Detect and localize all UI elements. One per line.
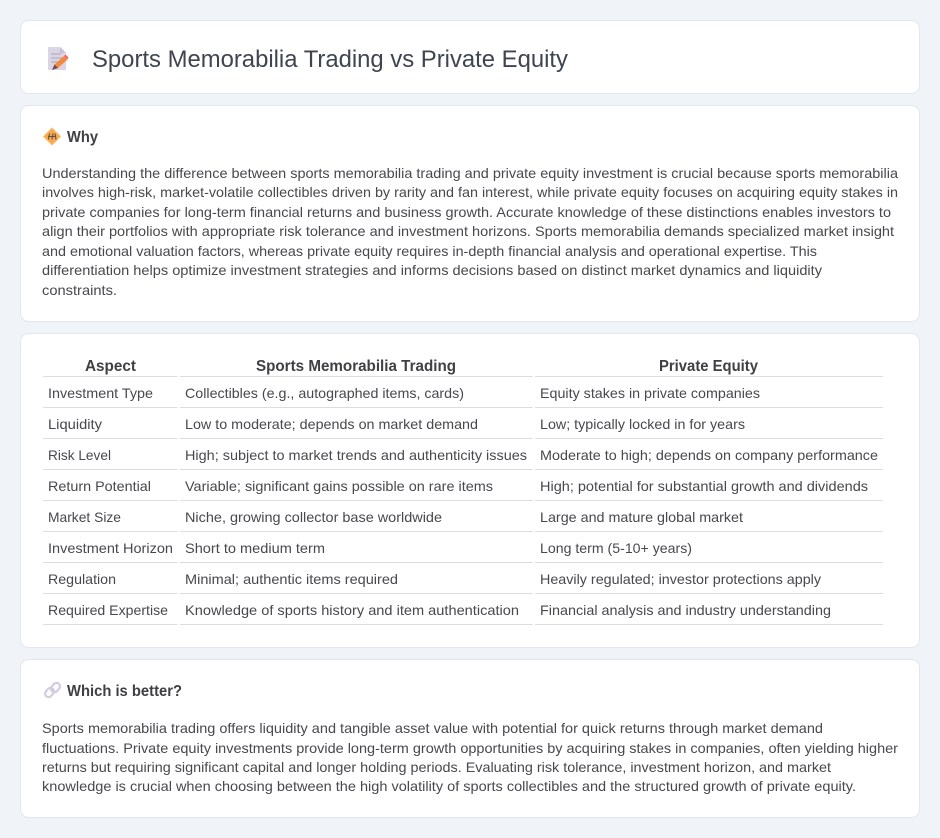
row: investment type: Equity stakes in private companies <box>540 385 760 401</box>
row: investment type: Investment Type <box>48 385 153 401</box>
panel: which is better <box>20 660 920 818</box>
text block: why paragraph: align their portfolios with appropriate risk tolerance and investment horizons. Sports memorabilia demands specialized market insight <box>42 223 894 239</box>
panel: why <box>20 106 920 322</box>
row: required expertise: Financial analysis and industry understanding <box>540 602 831 618</box>
row: return potential: Variable; significant gains possible on rare items <box>185 478 493 494</box>
row: investment horizon <box>48 540 692 556</box>
row: required expertise <box>48 602 831 618</box>
text block: why paragraph: constraints. <box>42 282 117 298</box>
row: liquidity <box>48 416 745 432</box>
text block: which is better paragraph: fluctuations. Private equity investments provide long-term growth opportunities by acquiring stakes in companies, often yielding higher <box>42 740 898 756</box>
table header row: Sports Memorabilia Trading <box>256 358 456 375</box>
row: return potential: Return Potential <box>48 478 151 494</box>
row: investment type: Collectibles (e.g., autographed items, cards) <box>185 385 464 401</box>
text block: why paragraph: Understanding the difference between sports memorabilia trading and private equity investment is crucial because sports memorabilia <box>42 165 898 181</box>
row: investment horizon: Short to medium term <box>185 540 325 556</box>
text block: which is better paragraph: returns but requiring significant capital and longer holding periods. Evaluating risk tolerance, investment horizon, and market <box>42 759 831 775</box>
text block: which is better paragraph: Sports memorabilia trading offers liquidity and tangible asset value with potential for quick returns through market demand <box>42 720 823 736</box>
row: liquidity: Low; typically locked in for years <box>540 416 745 432</box>
panel: comparison table <box>20 334 920 648</box>
row: regulation: Minimal; authentic items required <box>185 571 398 587</box>
icon: diamond warning <box>44 128 60 145</box>
panel: title header <box>20 20 920 94</box>
row: regulation <box>48 571 821 587</box>
title: Sports Memorabilia Trading vs Private Equity <box>92 46 568 73</box>
icon: chain link <box>44 681 61 699</box>
row: market size <box>48 509 743 525</box>
row: liquidity: Low to moderate; depends on market demand <box>185 416 478 432</box>
table header row: Private Equity <box>659 358 758 375</box>
text block: why paragraph: and emotional valuation factors, whereas private equity requires in-depth financial analysis and operational expertise. This <box>42 243 817 259</box>
row: market size: Market Size <box>48 509 121 525</box>
row: investment horizon: Investment Horizon <box>48 540 173 556</box>
row: market size: Large and mature global market <box>540 509 743 525</box>
text block: why paragraph: differentiation helps optimize investment strategies and informs decisions based on distinct market dynamics and liquidity <box>42 262 822 278</box>
text block: which is better paragraph <box>42 720 898 794</box>
row: return potential <box>48 478 868 494</box>
table header row <box>85 358 758 375</box>
row: return potential: High; potential for substantial growth and dividends <box>540 478 868 494</box>
row: market size: Niche, growing collector base worldwide <box>185 509 442 525</box>
row: regulation: Heavily regulated; investor protections apply <box>540 571 821 587</box>
table header row: Aspect <box>85 358 137 375</box>
row: required expertise: Required Expertise <box>48 602 168 618</box>
row: risk level <box>48 447 878 463</box>
icon: memo with pencil <box>48 47 68 70</box>
row: risk level: Moderate to high; depends on company performance <box>540 447 878 463</box>
text block: why paragraph: private companies for long-term financial returns and business growth. Accurate knowledge of these distinctions enables investors to <box>42 204 891 220</box>
heading: why: Why <box>67 129 98 146</box>
row: regulation: Regulation <box>48 571 116 587</box>
text block: why paragraph <box>42 165 898 298</box>
row: risk level: High; subject to market trends and authenticity issues <box>185 447 527 463</box>
heading: which is better: Which is better? <box>67 683 182 700</box>
row: investment horizon: Long term (5-10+ years) <box>540 540 692 556</box>
row: required expertise: Knowledge of sports history and item authentication <box>185 602 519 618</box>
text block: which is better paragraph: knowledge is crucial when choosing between the high volatility of sports collectibles and the structured growth of private equity. <box>42 778 856 794</box>
row: liquidity: Liquidity <box>48 416 102 432</box>
row: risk level: Risk Level <box>48 447 111 463</box>
text block: why paragraph: involves high-risk, market-volatile collectibles driven by rarity and fan interest, while private equity focuses on acquiring equity stakes in <box>42 184 898 200</box>
row: investment type <box>48 385 760 401</box>
